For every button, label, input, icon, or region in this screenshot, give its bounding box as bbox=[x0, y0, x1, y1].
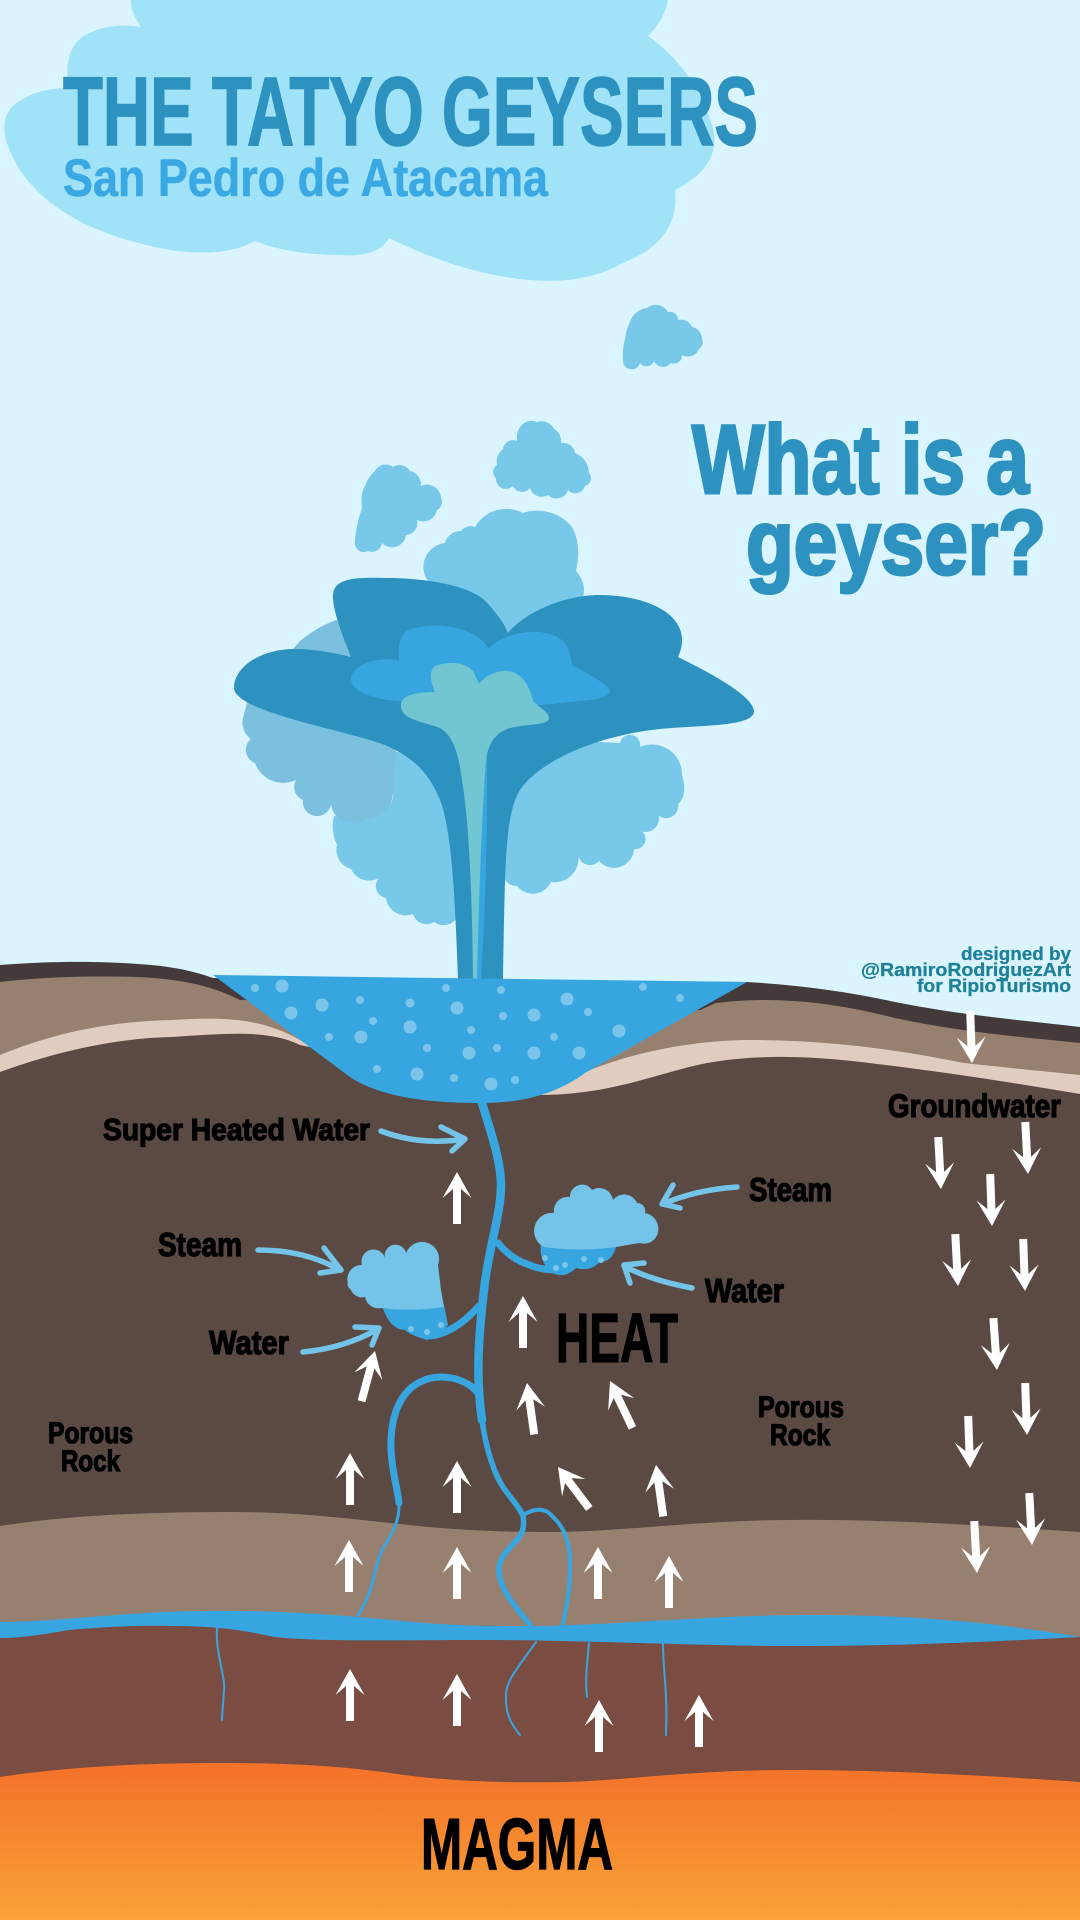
title: THE TATYO GEYSERS bbox=[63, 57, 758, 166]
rock layer: red brown bbox=[0, 1620, 1080, 1920]
steam cloud lower right bbox=[490, 735, 684, 894]
steam cloud top bbox=[423, 509, 584, 640]
small steam puff 2 bbox=[493, 421, 591, 499]
subtitle: San Pedro de Atacama bbox=[63, 149, 548, 208]
label: porous rock left: Rock bbox=[61, 1445, 120, 1478]
small steam puff 1 bbox=[623, 305, 703, 369]
designer credit bbox=[861, 944, 1071, 996]
rock layer: dark topsoil bbox=[0, 962, 1080, 1920]
small steam puff 3 bbox=[355, 464, 442, 552]
label: water left: Water bbox=[209, 1324, 289, 1361]
chamber right: steam and water bbox=[534, 1185, 658, 1275]
groundwater arrows descending bbox=[924, 1011, 1046, 1574]
plume core teal bbox=[401, 663, 549, 979]
designer credit: @RamiroRodriguezArt bbox=[861, 960, 1071, 980]
hot spring pool bbox=[213, 975, 747, 1103]
rock layer: tan bbox=[0, 977, 1080, 1920]
label: steam left: Steam bbox=[158, 1226, 242, 1263]
label: heat: HEAT bbox=[556, 1299, 678, 1377]
chamber left: steam and water bbox=[347, 1242, 448, 1340]
geyser water plume bbox=[234, 578, 754, 979]
label: porous rock right: Porous bbox=[758, 1391, 844, 1424]
magma layer bbox=[0, 1763, 1080, 1920]
label: porous rock left bbox=[48, 1417, 133, 1478]
heat arrows rising bbox=[334, 1172, 714, 1752]
callout arrow: super heated water bbox=[381, 1127, 465, 1151]
aquifer water layer bbox=[0, 1611, 1080, 1646]
callout arrow: steam left bbox=[258, 1248, 341, 1273]
title cloud bbox=[4, 0, 714, 281]
plume inner blue bbox=[351, 626, 610, 706]
steam cloud lower left bbox=[333, 745, 470, 925]
label: porous rock right: Rock bbox=[770, 1419, 830, 1452]
heading: what is a geyser bbox=[692, 405, 1046, 594]
label: magma: MAGMA bbox=[421, 1805, 613, 1885]
designer credit: for RipioTurismo bbox=[917, 976, 1071, 996]
callout arrow: water left bbox=[303, 1327, 379, 1352]
label: porous rock left: Porous bbox=[48, 1417, 133, 1450]
label: super heated water: Super Heated Water bbox=[103, 1112, 370, 1147]
rock layer: cream band bbox=[0, 1019, 1080, 1920]
plume column blue stripe bbox=[474, 745, 487, 979]
rock layer: porous rock bbox=[0, 1034, 1080, 1920]
designer credit: designed by bbox=[961, 944, 1071, 964]
callout arrow: water right bbox=[624, 1263, 692, 1288]
steam cloud left shadow bbox=[242, 620, 396, 824]
callout arrow: steam right bbox=[662, 1185, 737, 1208]
rock layer: lower tan bbox=[0, 1512, 1080, 1920]
underground water pipes bbox=[217, 1103, 666, 1735]
pool bubbles bbox=[251, 980, 684, 1090]
label: water right: Water bbox=[705, 1272, 784, 1309]
label: porous rock right bbox=[758, 1391, 844, 1452]
label: steam right: Steam bbox=[749, 1171, 832, 1208]
